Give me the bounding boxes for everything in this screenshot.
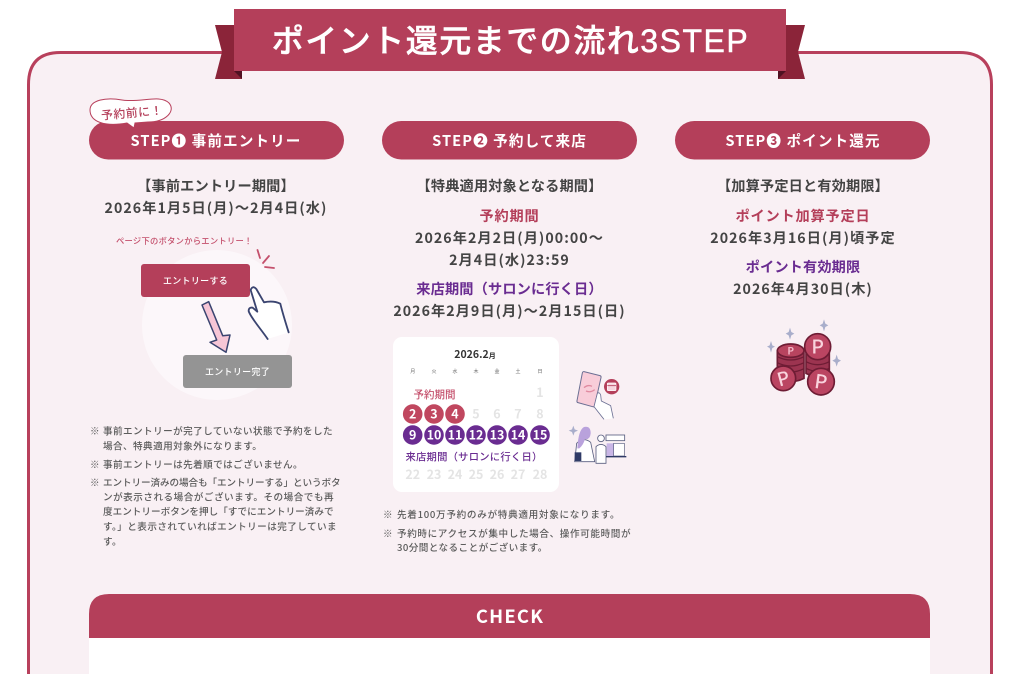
step 1 period: 【事前エントリー期間】 [137,176,295,196]
icon: click sparks [258,250,274,268]
reservation dates: 2 [409,404,416,422]
visit dates: 10 [427,424,441,444]
step 1 speech bubble [90,99,171,128]
step 1 period [105,176,327,218]
last row dates: 25 [469,464,483,483]
reservation dates [403,404,544,424]
last row dates: 24 [448,464,463,483]
weekday row: 火 [431,368,437,375]
step 2 periods: 2月4日(水)23:59 [449,250,570,270]
check heading: CHECK [476,603,544,629]
step 1 notes: ンが表示される場合がございます。その場合でも再 [103,490,334,504]
icon: point coins: P [787,342,794,357]
step 2 notes: ※ [383,526,393,540]
step 3 pill [675,121,930,160]
weekday row: 日 [537,368,543,375]
step 1 notes: 度エントリーボタンを押し「すでにエントリー済みで [103,504,334,518]
step 2 periods: 来店期間（サロンに行く日） [416,279,603,299]
step 3 pill: STEP❸ ポイント還元 [725,130,881,151]
last row dates: 27 [511,464,525,483]
step 2 pill [382,121,637,160]
step 1 notes: ※ [90,457,100,471]
last row dates: 22 [405,464,420,483]
visit dates: 14 [511,424,526,444]
step 2 periods: 2026年2月9日(月)～2月15日(日) [393,301,626,321]
caption: ページ下のボタンからエントリー！ [116,235,253,247]
step 1 notes: 場合、特典適用対象外になります。 [103,438,262,452]
step 1 illustration [116,235,292,400]
panel: check [89,594,930,674]
step 3 dates: ポイント有効期限 [746,257,860,277]
title ribbon [215,9,805,79]
entry complete button: エントリー完了 [205,365,270,378]
step 2 notes: 30分間となることがございます。 [397,540,548,554]
calendar: 1 [536,382,544,401]
visit dates: 13 [490,424,504,444]
icon: customer and salon [569,426,626,463]
reservation dates: 3 [430,404,438,422]
entry button: エントリーする [163,274,228,287]
weekday row: 木 [473,368,479,375]
icon: point coins [767,319,841,395]
step 2 periods: 【特典適用対象となる期間】 [417,176,602,196]
visit dates: 15 [533,424,547,444]
icon: point coins: P [774,363,793,392]
icon: pointing hand [249,287,289,339]
step 1 notes: 事前エントリーが完了していない状態で予約をした [103,424,333,438]
last row dates: 28 [533,464,547,483]
reservation period label: 予約期間 [414,387,456,402]
visit dates: 11 [448,424,462,444]
step 1 notes: 事前エントリーは先着順ではございません。 [103,457,303,471]
entry button [141,264,250,297]
step 2 periods [393,176,626,321]
step 1 notes: ※ [90,475,100,489]
title: ポイント還元までの流れ3STEP [272,23,749,59]
reservation dates: 4 [451,404,459,422]
calendar heading: 2026.2月 [454,347,496,362]
visit dates: 12 [469,424,483,444]
weekday row: 土 [515,368,521,375]
step 1 speech bubble: 予約前に！ [100,101,164,124]
icon: phone reservation [577,372,619,419]
step 2 periods: 2026年2月2日(月)00:00～ [415,228,604,248]
step 1 notes: エントリー済みの場合も「エントリーする」というボタ [103,475,341,489]
step 1 period: 2026年1月5日(月)～2月4日(水) [105,198,327,218]
last row dates: 23 [427,464,441,483]
last row dates [405,464,547,483]
entry complete button [183,355,292,388]
weekday row [410,368,543,375]
visit dates [403,424,550,445]
weekday row: 水 [452,368,458,375]
weekday row: 月 [410,368,415,375]
step 3 dates: 【加算予定日と有効期限】 [717,176,889,196]
step 2 notes: 予約時にアクセスが集中した場合、操作可能時間が [397,526,631,540]
icon: point coins: P [811,332,824,360]
calendar [393,337,559,492]
step 1 notes: す。」と表示されていればエントリーは完了していま [103,519,337,533]
step 2 notes: ※ [383,507,393,521]
step 1 notes: ※ [90,424,100,438]
step 3 dates [710,176,896,299]
reservation dates: 8 [536,404,544,422]
visit period label: 来店期間（サロンに行く日） [405,448,543,464]
check header [89,594,930,638]
step 3 dates: ポイント加算予定日 [736,206,870,226]
last row dates: 26 [490,464,504,483]
reservation dates: 7 [514,404,522,422]
weekday row: 金 [494,368,500,375]
icon: arrow [202,302,230,352]
step 1 pill: STEP❶ 事前エントリー [131,130,301,151]
step 3 dates: 2026年3月16日(月)頃予定 [710,228,896,248]
step 1 notes [90,424,341,548]
reservation dates: 5 [472,404,480,422]
reservation dates: 6 [493,404,501,422]
step 1 pill [89,121,344,160]
step 2 pill: STEP❷ 予約して来店 [432,130,587,151]
step 2 notes [383,507,631,554]
step 1 notes: す。 [103,534,122,548]
step 2 notes: 先着100万予約のみが特典適用対象になります。 [397,507,620,521]
icon: point coins: P [813,366,829,395]
step 3 dates: 2026年4月30日(木) [733,279,873,299]
step 2 periods: 予約期間 [480,206,539,226]
visit dates: 9 [409,424,416,444]
